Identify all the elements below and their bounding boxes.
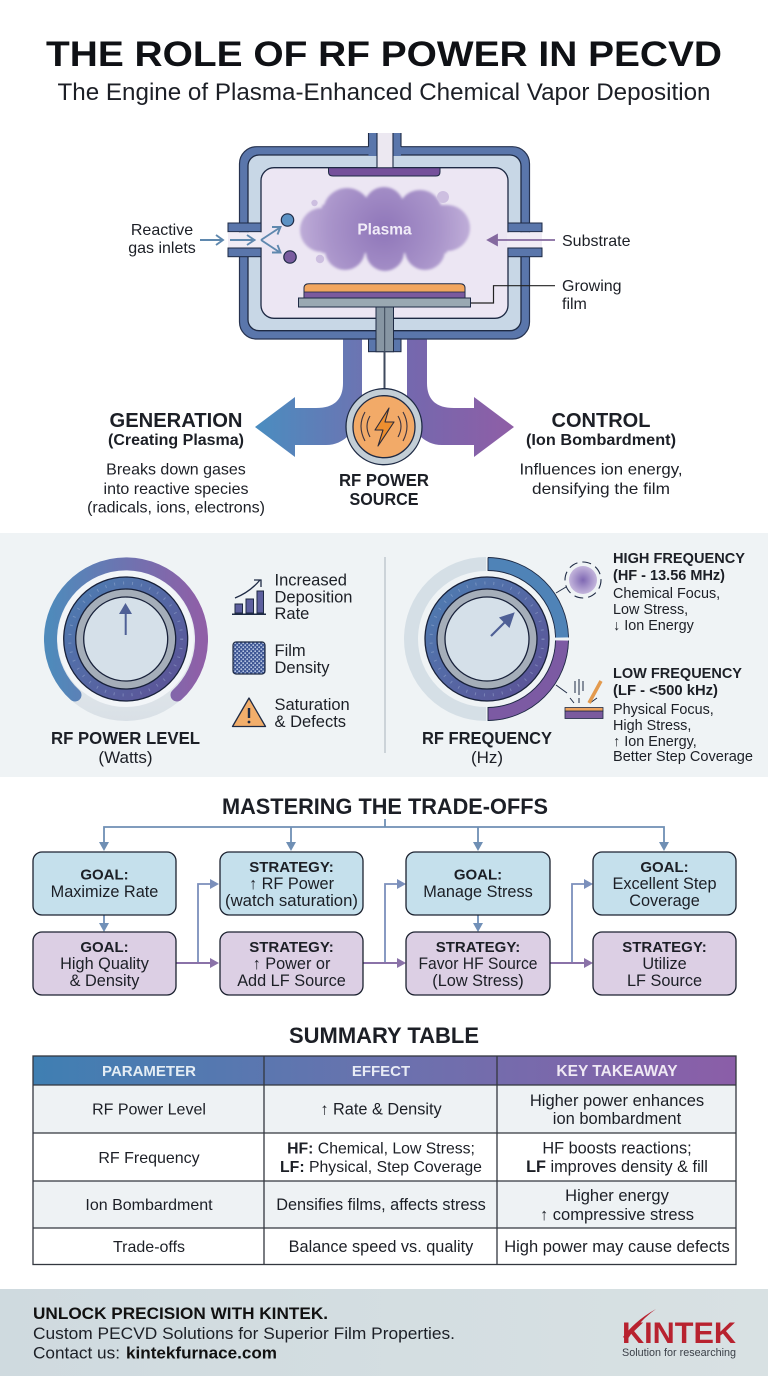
knob: RF frequency [411, 558, 568, 720]
gas particle: blue [281, 214, 294, 226]
row: RF frequency [98, 1140, 708, 1176]
footer text: UNLOCK PRECISION WITH KINTEK. [33, 1305, 328, 1323]
box: goal manage stress: GOAL: [454, 866, 502, 884]
heading: summary table: SUMMARY TABLE [289, 1023, 479, 1048]
box: strategy utilize LF source: Utilize [642, 955, 687, 973]
box: strategy power or LF source: STRATEGY: [249, 939, 334, 956]
row: trade-offs: Trade-offs [113, 1239, 185, 1256]
icon: low frequency ion bombardment [556, 679, 603, 718]
box: goal high quality and density [33, 932, 176, 995]
plasma cloud [300, 187, 470, 271]
text block: RF power source: SOURCE [350, 489, 418, 509]
row: ion bombardment: ↑ compressive stress [540, 1206, 694, 1224]
text block: generation: Breaks down gases [106, 462, 246, 478]
box: strategy favor HF source: STRATEGY: [436, 939, 520, 956]
box: strategy power or LF source [220, 932, 363, 995]
text block: control: (Ion Bombardment) [526, 432, 676, 449]
growing film [304, 284, 465, 298]
box: strategy utilize LF source [593, 932, 736, 995]
box: strategy power or LF source: Add LF Source [237, 972, 346, 990]
footer text: Custom PECVD Solutions for Superior Film Properties. [33, 1325, 455, 1343]
box: goal high quality and density: GOAL: [80, 939, 129, 956]
knob label: RF frequency [422, 728, 552, 767]
row: RF power level: ion bombardment [553, 1110, 682, 1128]
left port [228, 223, 262, 257]
row: ion bombardment: Ion Bombardment [85, 1197, 213, 1214]
needle [119, 603, 132, 635]
table header [33, 1056, 736, 1085]
chamber inner jacket [248, 155, 521, 331]
text: low frequency: LOW FREQUENCY [613, 665, 742, 682]
text block: RF power source [339, 470, 429, 509]
text: saturation and defects: & Defects [274, 713, 346, 731]
text block: generation: (radicals, ions, electrons) [87, 500, 265, 516]
knob label: RF frequency: RF FREQUENCY [422, 728, 552, 748]
knob label: RF power level [51, 728, 200, 767]
text: film density: Density [274, 659, 330, 677]
growing film leader line [471, 286, 555, 303]
box: strategy utilize LF source: LF Source [627, 972, 702, 990]
plasma label: Plasma [357, 222, 412, 238]
flowchart: trade-offs [33, 819, 736, 995]
branch arrows up [198, 879, 593, 963]
text: film density: Film [274, 642, 306, 660]
box: strategy RF power: STRATEGY: [249, 859, 334, 876]
knob label: RF power level: (Watts) [98, 748, 153, 767]
text: high frequency: Chemical Focus, [613, 586, 720, 602]
text: low frequency: (LF - <500 kHz) [613, 682, 718, 699]
label: reactive gas inlets: Reactive [131, 222, 193, 239]
icon: high frequency plasma [556, 562, 601, 598]
row: RF frequency: RF Frequency [98, 1150, 200, 1167]
table header: PARAMETER [102, 1063, 196, 1080]
box: strategy RF power: ↑ RF Power [249, 875, 335, 893]
icon: warning [232, 698, 266, 726]
row: RF frequency: HF: Chemical, Low Stress; [287, 1140, 475, 1158]
label: growing film: film [562, 296, 587, 313]
box: goal manage stress [406, 852, 550, 915]
row: RF frequency: LF: Physical, Step Coverage [280, 1159, 482, 1176]
text: high frequency: HIGH FREQUENCY [613, 550, 745, 567]
panel: power and frequency controls [0, 533, 768, 777]
text block: control: CONTROL [552, 409, 650, 432]
row: ion bombardment: Higher energy [565, 1187, 670, 1205]
diagram: PECVD chamber [200, 133, 555, 465]
horizontal arrows [176, 958, 593, 968]
substrate arrow [488, 235, 555, 245]
top gas pipe [368, 133, 401, 168]
footer text: Contact us: [33, 1344, 120, 1362]
summary table [33, 1056, 736, 1264]
table header: EFFECT [352, 1063, 410, 1080]
label: reactive gas inlets: gas inlets [128, 240, 196, 257]
box: goal maximize rate: Maximize Rate [51, 883, 158, 901]
title: THE ROLE OF RF POWER IN PECVD [46, 35, 722, 74]
box: goal excellent step coverage [593, 852, 736, 915]
knob label: RF power level: RF POWER LEVEL [51, 728, 200, 748]
row: RF power level: Higher power enhances [530, 1092, 704, 1110]
text: low frequency: ↑ Ion Energy, [613, 734, 697, 750]
text: low frequency [613, 665, 753, 765]
text block: control: Influences ion energy, [520, 462, 682, 478]
row: RF frequency: LF improves density & fill [526, 1158, 708, 1176]
icon: film density [233, 642, 265, 674]
box: goal excellent step coverage: Coverage [629, 892, 700, 910]
label: substrate: Substrate [562, 233, 631, 250]
text block: control [520, 409, 682, 498]
text: increased deposition rate: Increased [274, 572, 347, 590]
box: strategy RF power: (watch saturation) [225, 892, 358, 910]
arrow: control [407, 335, 514, 457]
logo: KINTEK: Solution for researching [622, 1347, 736, 1359]
text: increased deposition rate: Deposition [274, 588, 352, 606]
substrate holder plate [298, 298, 470, 307]
text block: generation [87, 409, 265, 516]
box: strategy favor HF source [406, 932, 550, 995]
text: saturation and defects: Saturation [274, 696, 350, 714]
row: RF frequency: HF boosts reactions; [542, 1140, 692, 1158]
box: goal excellent step coverage: GOAL: [640, 859, 689, 876]
text: high frequency: ↓ Ion Energy [613, 618, 695, 634]
logo: KINTEK: KINTEK [622, 1317, 736, 1350]
text: low frequency: Physical Focus, [613, 702, 714, 718]
box: goal maximize rate [33, 852, 176, 915]
row: RF power level [92, 1092, 704, 1128]
footer [0, 1289, 768, 1376]
box: strategy favor HF source: Favor HF Source [418, 955, 538, 973]
top connector arrows [99, 819, 669, 851]
top electrode [328, 168, 440, 176]
right port [507, 223, 542, 257]
row: trade-offs: Balance speed vs. quality [289, 1238, 474, 1256]
text block: RF power source: RF POWER [339, 470, 429, 490]
arrow: generation [255, 335, 362, 457]
text: increased deposition rate [274, 572, 352, 623]
substrate layer [304, 292, 465, 298]
row: RF power level: ↑ Rate & Density [320, 1100, 442, 1118]
label: growing film [562, 278, 622, 313]
row: trade-offs: High power may cause defects [504, 1238, 730, 1256]
needle [491, 614, 513, 636]
box: goal high quality and density: High Quality [60, 955, 150, 973]
chamber wall [240, 147, 530, 339]
text block: generation: (Creating Plasma) [108, 432, 244, 449]
text: saturation and defects [274, 696, 350, 731]
text block: control: densifying the film [532, 481, 670, 498]
box: strategy favor HF source: (Low Stress) [432, 972, 524, 990]
text: low frequency: High Stress, [613, 718, 691, 734]
subtitle: The Engine of Plasma-Enhanced Chemical Vapor Deposition [58, 79, 710, 106]
row: ion bombardment [85, 1187, 694, 1224]
electrode stem [368, 307, 401, 392]
text: low frequency: Better Step Coverage [613, 749, 753, 765]
text: high frequency: (HF - 13.56 MHz) [613, 567, 725, 584]
box: goal maximize rate: GOAL: [80, 866, 129, 884]
icon: RF power source [346, 389, 422, 465]
row: ion bombardment: Densifies films, affects stress [276, 1196, 486, 1214]
box: strategy RF power [220, 852, 363, 915]
logo: KINTEK [622, 1309, 736, 1359]
label: reactive gas inlets [128, 222, 196, 257]
chamber interior [261, 168, 508, 318]
row: trade-offs [113, 1238, 730, 1256]
box: goal high quality and density: & Density [70, 972, 140, 990]
vertical arrows [99, 915, 483, 932]
table header: KEY TAKEAWAY [556, 1063, 678, 1080]
text: high frequency: Low Stress, [613, 602, 688, 618]
knob label: RF frequency: (Hz) [471, 748, 503, 767]
footer text: kintekfurnace.com [126, 1344, 277, 1362]
row: RF power level: RF Power Level [92, 1102, 206, 1118]
icon: deposition rate chart [232, 580, 266, 614]
box: strategy power or LF source: ↑ Power or [253, 955, 331, 973]
text: film density [274, 642, 330, 677]
footer text [33, 1305, 455, 1362]
label: growing film: Growing [562, 278, 622, 295]
gas inlet arrows [200, 227, 280, 252]
box: strategy utilize LF source: STRATEGY: [622, 939, 707, 956]
box: goal excellent step coverage: Excellent Step [612, 875, 717, 893]
text block: generation: GENERATION [110, 409, 242, 432]
text: high frequency [613, 550, 745, 634]
knob: RF power level [44, 557, 208, 721]
text: increased deposition rate: Rate [274, 605, 309, 623]
box: goal manage stress: Manage Stress [423, 883, 533, 901]
heading: mastering the trade-offs: MASTERING THE TRADE-OFFS [222, 794, 548, 819]
gas particle: purple [284, 251, 296, 263]
text block: generation: into reactive species [104, 481, 248, 498]
